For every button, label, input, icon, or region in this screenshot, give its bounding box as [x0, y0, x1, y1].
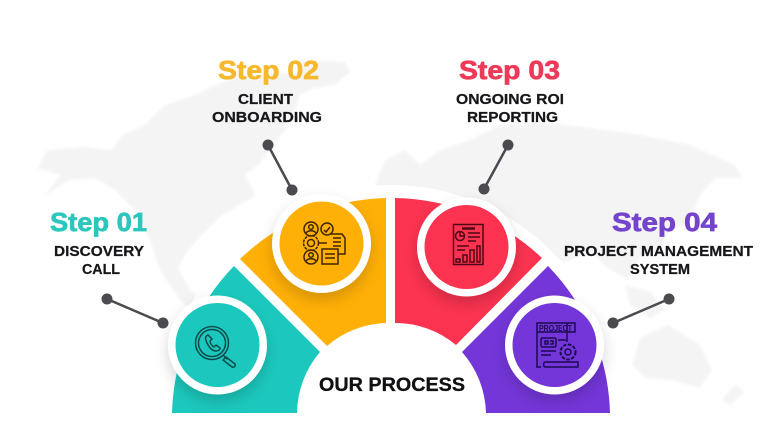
label: step 04	[564, 244, 753, 278]
icon: project document with gear	[537, 323, 578, 367]
circle badge: step 01	[168, 296, 267, 394]
connector: step 02	[262, 140, 298, 196]
segment: step 01 teal	[172, 266, 320, 413]
label: step 04: SYSTEM	[630, 262, 690, 278]
label: step 02: CLIENT	[238, 92, 293, 108]
label: step 01: DISCOVERY	[54, 244, 144, 260]
label: step 03: REPORTING	[467, 110, 558, 126]
heading: step 03: Step 03	[459, 55, 560, 85]
label: step 04: PROJECT MANAGEMENT	[564, 244, 753, 260]
connector: step 04	[608, 294, 674, 328]
title: our process: OUR PROCESS	[319, 374, 465, 396]
icon: report document	[454, 224, 483, 264]
heading: step 04: Step 04	[612, 207, 718, 237]
world map background	[37, 60, 745, 410]
label: step 03	[456, 92, 564, 126]
connector: step 03	[478, 140, 514, 194]
heading: step 02: Step 02	[218, 55, 319, 85]
label: step 02	[212, 92, 322, 126]
white halo behind the arc	[163, 185, 619, 413]
label: step 03: ONGOING ROI	[456, 92, 564, 108]
label: step 01	[54, 244, 144, 278]
circle badge: step 04	[505, 296, 604, 394]
icon: magnifier with phone	[196, 326, 235, 367]
label: step 01: CALL	[82, 262, 120, 278]
segment: step 03 red	[395, 198, 542, 345]
circle badge: step 02	[272, 194, 371, 293]
connector: step 01	[102, 294, 168, 328]
label: step 02: ONBOARDING	[212, 110, 322, 126]
segment: step 02 yellow	[240, 198, 386, 346]
circle badge: step 03	[417, 198, 516, 296]
icon: client onboarding	[304, 222, 345, 264]
heading: step 01: Step 01	[50, 207, 147, 237]
icon: project document with gear: PROJECT	[539, 324, 572, 333]
segment: step 04 purple	[462, 266, 610, 413]
